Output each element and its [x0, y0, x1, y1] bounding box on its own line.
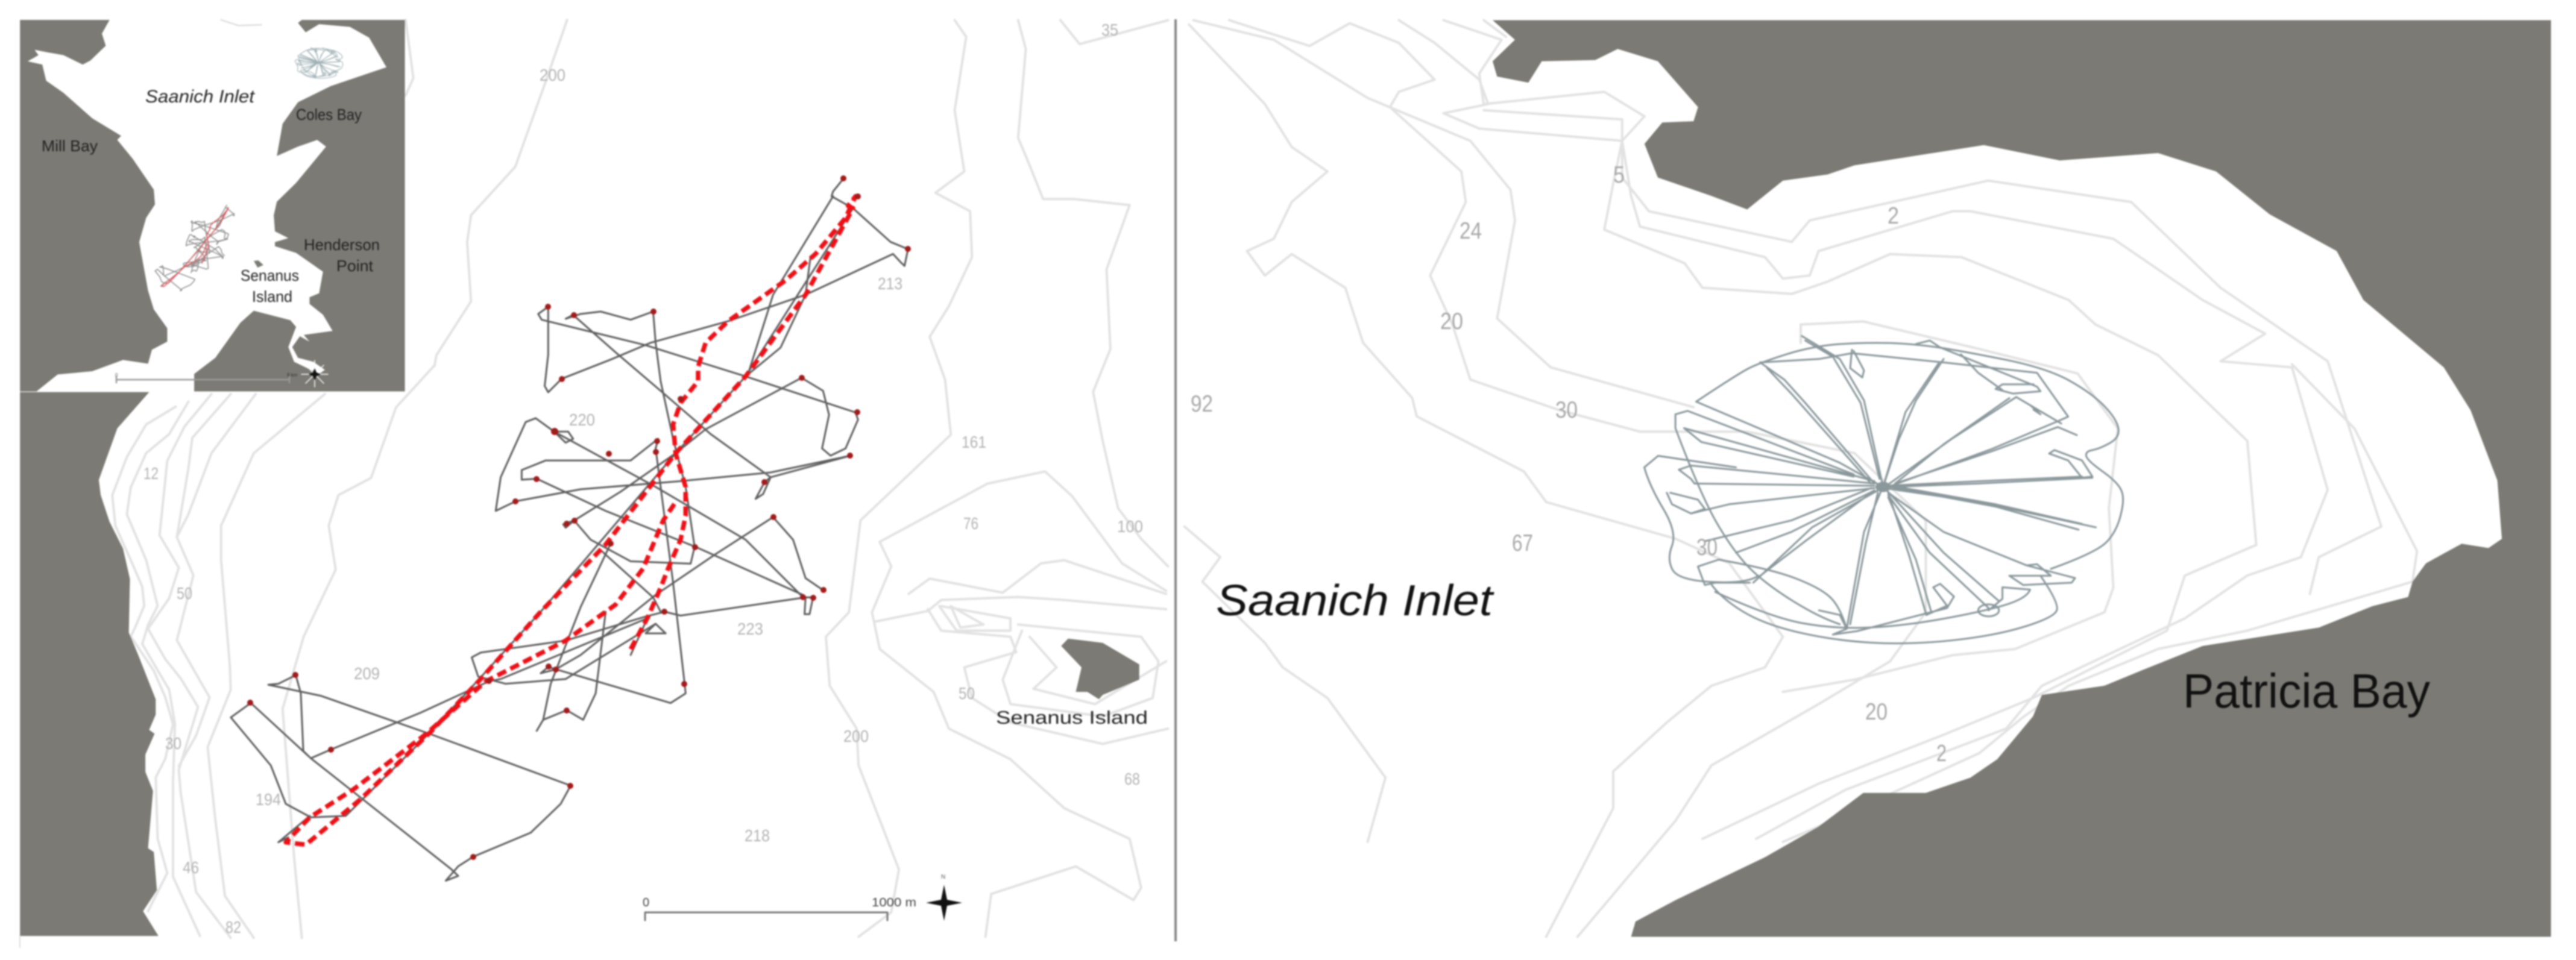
divider between panels [1174, 19, 1177, 941]
label: depth numbers, study area: 161 [962, 433, 986, 451]
scale bar: inset: 8 km [287, 372, 298, 378]
icon: north arrow: N [941, 874, 945, 880]
scale bar: inset [115, 372, 298, 383]
label: depth numbers, study area: 12 [143, 464, 159, 483]
label: depth numbers, study area: 76 [963, 514, 978, 533]
labels: Island [252, 287, 292, 306]
label: depth numbers, study area: 35 [1101, 20, 1118, 39]
survey track: red dashed route [286, 196, 855, 845]
label: Senanus Island: Senanus Island [996, 707, 1148, 728]
label: Saanich Inlet: Saanich Inlet [1216, 577, 1494, 625]
survey pattern: radial spokes [1644, 336, 2123, 644]
icon: inset north arrow [301, 360, 328, 387]
label: depth numbers, study area: 200 [843, 727, 869, 745]
label: depth numbers, study area: 213 [878, 274, 902, 293]
label: depth numbers, study area: 218 [745, 826, 770, 845]
panel: Patricia Bay study area [1185, 20, 2551, 936]
label: depth numbers, study area: 100 [1117, 517, 1143, 536]
label: depth numbers, Patricia Bay: 5 [1613, 162, 1625, 188]
icon: north arrow [926, 874, 962, 921]
label: depth numbers, study area: 209 [354, 664, 380, 683]
label: depth numbers, study area: 223 [737, 620, 763, 638]
label: depth numbers, study area [143, 20, 1143, 936]
label: depth numbers, study area: 68 [1124, 770, 1140, 788]
label: depth numbers, Patricia Bay: 92 [1191, 391, 1213, 417]
waypoints: red dots [247, 175, 911, 860]
labels: Mill Bay [42, 137, 98, 155]
label: depth numbers, study area: 30 [165, 734, 181, 753]
mini survey tracks [155, 205, 235, 291]
label: depth numbers, study area: 200 [540, 66, 565, 84]
land: Senanus Island [1061, 639, 1139, 699]
mini spoke pattern [295, 48, 343, 78]
depth contours: north [406, 20, 567, 366]
labels: Henderson [304, 236, 380, 254]
label: depth numbers, study area: 46 [183, 858, 199, 877]
scale bar: 1000 m: 0 [643, 896, 649, 909]
label: depth numbers, Patricia Bay: 30 [1696, 535, 1718, 560]
labels: Senanus [241, 266, 299, 284]
survey tracks: black lines [231, 178, 908, 880]
scale bar: 1000 m: 1000 m [872, 896, 916, 909]
label: depth numbers, Patricia Bay: 30 [1555, 397, 1578, 423]
scale bar: 1000 m [643, 896, 916, 920]
label: depth numbers, Patricia Bay: 67 [1512, 530, 1533, 556]
label: depth numbers, Patricia Bay: 2 [1888, 203, 1899, 229]
label: Patricia Bay: Patricia Bay [2183, 664, 2430, 718]
label: depth numbers, Patricia Bay [1191, 162, 1947, 767]
inset: Saanich Inlet overview [20, 20, 405, 392]
labels: Point [336, 257, 374, 275]
land: Patricia Bay shore [1493, 20, 2551, 936]
labels: Saanich Inlet [145, 87, 256, 107]
panel: Senanus Island study area [19, 20, 1168, 948]
labels: Coles Bay [296, 105, 362, 124]
label: depth numbers, study area: 220 [569, 410, 595, 429]
depth contours: west side [112, 365, 435, 938]
mini red route [162, 207, 228, 286]
label: depth numbers, study area: 50 [177, 584, 192, 603]
label: depth numbers, Patricia Bay: 24 [1460, 218, 1482, 244]
land: west shore [20, 392, 159, 936]
label: depth numbers, Patricia Bay: 2 [1936, 741, 1947, 767]
depth contours [1185, 20, 2417, 936]
scale bar: inset: 0 [115, 372, 118, 378]
land and water [20, 20, 405, 392]
label: depth numbers, study area: 82 [225, 918, 241, 936]
label: depth numbers, study area: 194 [256, 790, 281, 809]
label: depth numbers, Patricia Bay: 20 [1865, 699, 1888, 725]
depth contours: east and Senanus Island [826, 20, 1168, 936]
labels [42, 87, 380, 306]
label: depth numbers, Patricia Bay: 20 [1440, 309, 1463, 334]
label: depth numbers, study area: 50 [959, 684, 975, 703]
